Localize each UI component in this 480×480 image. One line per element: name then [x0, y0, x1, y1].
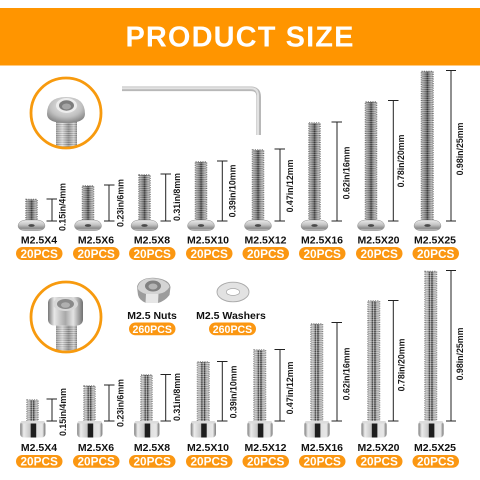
quantity pill: 20PCS: [361, 455, 398, 469]
screw: [358, 102, 384, 231]
column: M2.5X8 button head: [129, 173, 182, 261]
quantity pill: 20PCS: [21, 455, 58, 469]
label: M2.5X8: [134, 442, 170, 454]
quantity pill: 20PCS: [247, 247, 285, 261]
label: M2.5X25: [414, 234, 456, 246]
label: M2.5X25: [414, 442, 456, 454]
screw: [418, 272, 444, 438]
dimension text: 0.39in/10mm: [228, 365, 238, 418]
icon: hex nut: [137, 278, 170, 303]
screw: [414, 72, 441, 231]
column: M2.5X4 socket head: [16, 388, 68, 469]
quantity pill: 20PCS: [417, 455, 455, 469]
dimension text: 0.62in/16mm: [342, 347, 352, 400]
dimension line: [104, 185, 114, 221]
label: M2.5X4: [21, 234, 57, 246]
dimension text: 0.31in/8mm: [172, 173, 182, 221]
column: M2.5X16 button head: [299, 122, 352, 261]
nuts label: M2.5 Nuts: [127, 310, 177, 322]
dimension text: 0.47in/12mm: [285, 159, 295, 212]
dimension line: [160, 174, 171, 221]
column: M2.5X4 button head: [16, 183, 68, 261]
dimension text: 0.98in/25mm: [455, 122, 465, 175]
label: M2.5X12: [244, 234, 287, 246]
label: M2.5X6: [78, 442, 114, 454]
column: M2.5X12 button head: [242, 149, 295, 261]
quantity pill: 20PCS: [78, 247, 115, 261]
dimension text: 0.78in/20mm: [396, 338, 406, 391]
icon: washer: [217, 282, 249, 302]
nuts quantity pill: 260PCS: [132, 324, 172, 336]
label: M2.5X20: [357, 442, 400, 454]
dimension text: 0.62in/16mm: [342, 146, 352, 199]
dimension text: 0.15in/4mm: [58, 388, 68, 436]
dimension text: 0.15in/4mm: [58, 183, 68, 231]
quantity pill: 20PCS: [361, 247, 398, 261]
label: M2.5X12: [244, 442, 287, 454]
label: M2.5X10: [187, 234, 229, 246]
label: M2.5X16: [301, 234, 343, 246]
screw: [247, 350, 273, 438]
quantity pill: 20PCS: [191, 247, 228, 261]
dimension text: 0.23in/6mm: [116, 379, 126, 427]
icon: hex key: [122, 88, 259, 135]
quantity pill: 20PCS: [417, 247, 455, 261]
column: M2.5X8 socket head: [129, 373, 182, 469]
screw: [74, 186, 102, 231]
quantity pill: 20PCS: [21, 247, 58, 261]
label: M2.5X6: [78, 234, 114, 246]
dimension line: [332, 322, 342, 421]
dimension line: [217, 362, 228, 421]
title: PRODUCT SIZE: [125, 22, 355, 54]
dimension line: [388, 300, 398, 421]
quantity pill: 20PCS: [78, 455, 115, 469]
dimension text: 0.98in/25mm: [455, 327, 465, 380]
dimension line: [388, 100, 398, 221]
dimension text: 0.39in/10mm: [228, 164, 238, 217]
quantity pill: 20PCS: [247, 455, 285, 469]
dimension text: 0.23in/6mm: [116, 179, 126, 227]
screw: [20, 400, 45, 438]
column: M2.5X25 button head: [412, 70, 465, 261]
dimension text: 0.31in/8mm: [172, 373, 182, 421]
screw: [131, 175, 158, 231]
washers quantity pill: 260PCS: [213, 324, 252, 336]
screw: [361, 301, 387, 438]
dimension line: [446, 70, 456, 221]
screw: [18, 200, 45, 231]
icon: button head screw close-up: [31, 78, 101, 150]
label: M2.5X20: [357, 234, 400, 246]
dimension line: [104, 385, 114, 421]
quantity pill: 20PCS: [134, 455, 171, 469]
screw: [301, 123, 328, 231]
washers label: M2.5 Washers: [196, 310, 266, 322]
quantity pill: 20PCS: [304, 455, 341, 469]
dimension line: [46, 199, 57, 221]
column: M2.5X10 button head: [186, 161, 238, 261]
dimension line: [446, 270, 456, 421]
label: M2.5X10: [187, 442, 229, 454]
column: M2.5X25 socket head: [412, 270, 465, 469]
column: M2.5X6 socket head: [73, 379, 126, 469]
dimension line: [46, 399, 57, 421]
quantity pill: 20PCS: [304, 247, 341, 261]
dimension text: 0.78in/20mm: [396, 134, 406, 187]
dimension line: [217, 161, 228, 221]
column: M2.5X20 button head: [356, 100, 406, 261]
screw: [77, 386, 102, 438]
column: M2.5X12 socket head: [242, 350, 295, 469]
column: M2.5X10 socket head: [186, 362, 238, 469]
column: M2.5X20 socket head: [356, 300, 406, 469]
screw: [304, 324, 330, 438]
title banner: [0, 8, 480, 66]
dimension text: 0.47in/12mm: [285, 361, 295, 414]
screw: [191, 362, 216, 438]
quantity pill: 20PCS: [134, 247, 171, 261]
label: M2.5X16: [301, 442, 343, 454]
dimension line: [274, 350, 285, 421]
column: M2.5X6 button head: [73, 179, 126, 261]
dimension line: [332, 122, 342, 221]
label: M2.5X8: [134, 234, 170, 246]
dimension line: [160, 374, 171, 421]
column: M2.5X16 socket head: [299, 322, 352, 469]
icon: socket cap screw close-up: [31, 282, 101, 354]
quantity pill: 20PCS: [191, 455, 228, 469]
label: M2.5X4: [21, 442, 57, 454]
dimension line: [274, 149, 285, 221]
screw: [244, 150, 272, 231]
screw: [134, 375, 159, 438]
screw: [188, 162, 214, 231]
